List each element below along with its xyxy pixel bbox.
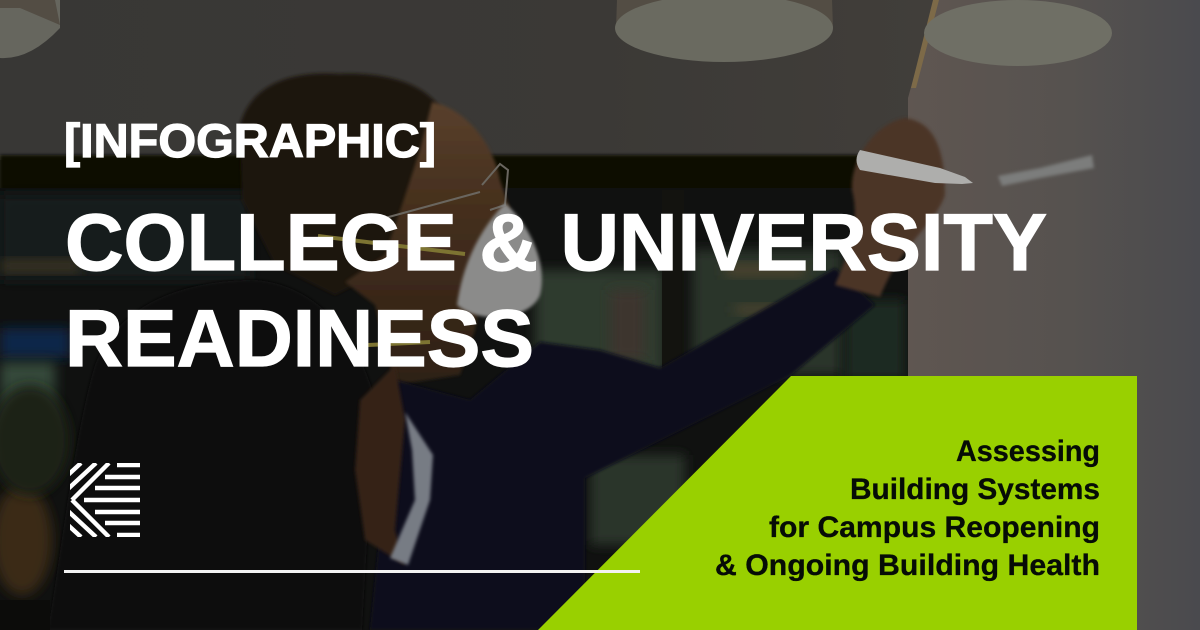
wall edge: [911, 0, 939, 88]
heading line 1: COLLEGE & UNIVERSITY: [65, 198, 1047, 288]
whiteboard wall: [908, 0, 1200, 630]
callout text: Assessing: [956, 435, 1100, 468]
window interior: [0, 188, 920, 630]
man: face and neck: [345, 102, 510, 385]
marker pen: [856, 150, 973, 184]
callout text: for Campus Reopening: [769, 511, 1100, 544]
left bottom dark: [0, 600, 50, 630]
dark window header band: [0, 155, 920, 191]
ceiling: [0, 0, 1200, 160]
callout text: & Ongoing Building Health: [715, 549, 1100, 582]
divider rule: [64, 570, 640, 573]
woman: hand: [355, 365, 405, 565]
man: face mask: [457, 203, 542, 317]
title group: [64, 114, 1047, 384]
heading line 2: READINESS: [65, 294, 534, 384]
man: glasses: [385, 164, 508, 218]
man: navy sweater and arm: [370, 268, 875, 630]
callout text: [715, 435, 1100, 582]
man: hair: [240, 73, 440, 295]
man: yellow mask strap: [318, 236, 465, 345]
callout text: Building Systems: [850, 473, 1100, 506]
woman: hanging mask: [390, 412, 433, 565]
ceiling lamps: [0, 0, 1112, 66]
woman: long dark hair: [48, 280, 375, 630]
icon: brand logo: [68, 463, 140, 537]
label: infographic tag: [INFOGRAPHIC]: [64, 114, 436, 167]
man: hand: [835, 118, 945, 297]
panel: green callout: [538, 376, 1137, 630]
wall marker reflection: [998, 155, 1094, 186]
